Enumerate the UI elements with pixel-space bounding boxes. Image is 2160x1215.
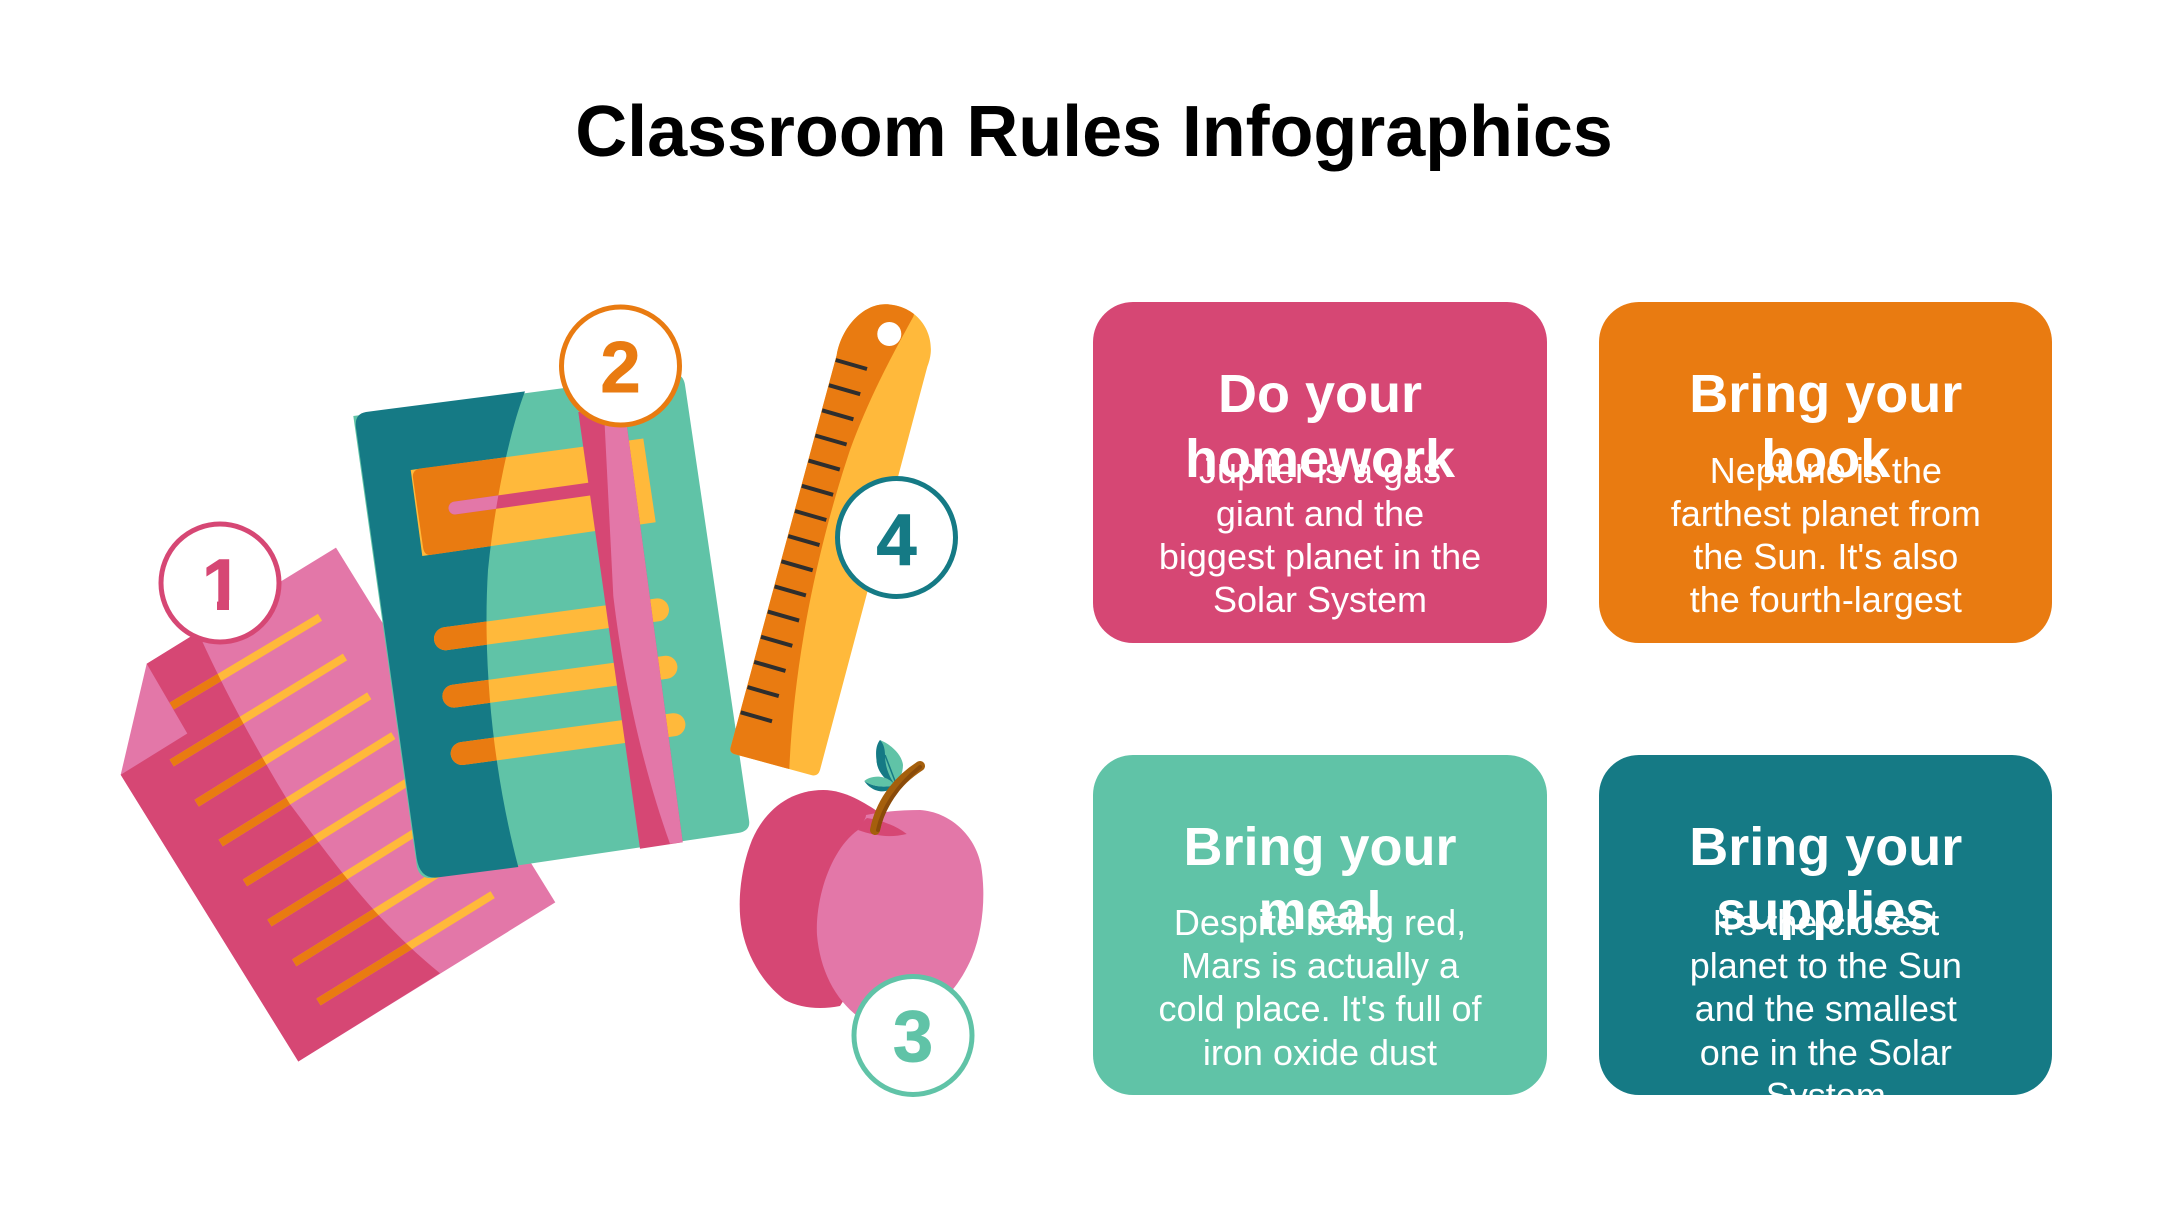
ruler ticks [741,360,867,721]
body text: cold place. It's full of [1158,988,1482,1029]
number badge 4 [838,478,956,596]
body text: planet to the Sun [1690,945,1962,986]
heading: book [1761,429,1890,489]
heading: homework [1185,429,1455,489]
notebook label [411,438,656,556]
heading: supplies [1716,881,1935,941]
body text [1690,902,1962,1095]
heading: meal [1258,881,1382,941]
number badge 4: 4 [876,500,917,580]
body text: the Sun. It's also [1693,536,1958,577]
heading: Bring your [1689,364,1962,424]
body text: giant and the [1216,493,1424,534]
body text: Jupiter is a gas [1199,450,1441,490]
apple leaves [864,740,903,791]
illustration: notebook [353,374,749,878]
heading: Do your [1218,364,1422,424]
panel: do your homework [1093,302,1547,642]
body text: It's the closest [1712,902,1939,943]
panel: bring your meal [1093,754,1547,1095]
body text: iron oxide dust [1203,1032,1437,1073]
heading [1183,816,1456,941]
number badge 2 [562,307,680,425]
title: Classroom Rules Infographics [575,92,1613,172]
number badge 1 [161,524,279,642]
body text: Mars is actually a [1181,945,1459,986]
heading [1185,364,1455,489]
notebook lines [446,610,674,754]
apple hollow [858,818,907,836]
panel: bring your book [1599,302,2052,642]
number badge 1: 1 [202,546,242,626]
panel: bring your supplies [1599,754,2052,1095]
number badge 3: 3 [893,997,933,1077]
body text [1671,450,1981,620]
illustration: paper sheet [121,548,555,1062]
body text [1159,450,1481,620]
body text: Solar System [1213,579,1427,620]
heading: Bring your [1183,816,1456,876]
apple stem [875,766,920,830]
body text: biggest planet in the [1159,536,1481,577]
illustration: apple [740,740,983,1018]
number badge 3 [854,976,972,1094]
body text: the fourth-largest [1690,579,1962,620]
heading [1689,364,1962,489]
illustration: classroom supplies [120,304,984,1097]
body text: one in the Solar [1700,1032,1952,1073]
number badge 2: 2 [600,328,641,408]
body text: and the smallest [1695,988,1957,1029]
notebook bookmark [578,412,683,849]
illustration: ruler [730,304,931,775]
body text [1158,902,1482,1073]
body text: farthest planet from [1671,493,1981,534]
heading [1689,816,1962,941]
body text: Neptune is the [1710,450,1942,490]
body text: Despite being red, [1174,902,1466,943]
heading: Bring your [1689,816,1962,876]
